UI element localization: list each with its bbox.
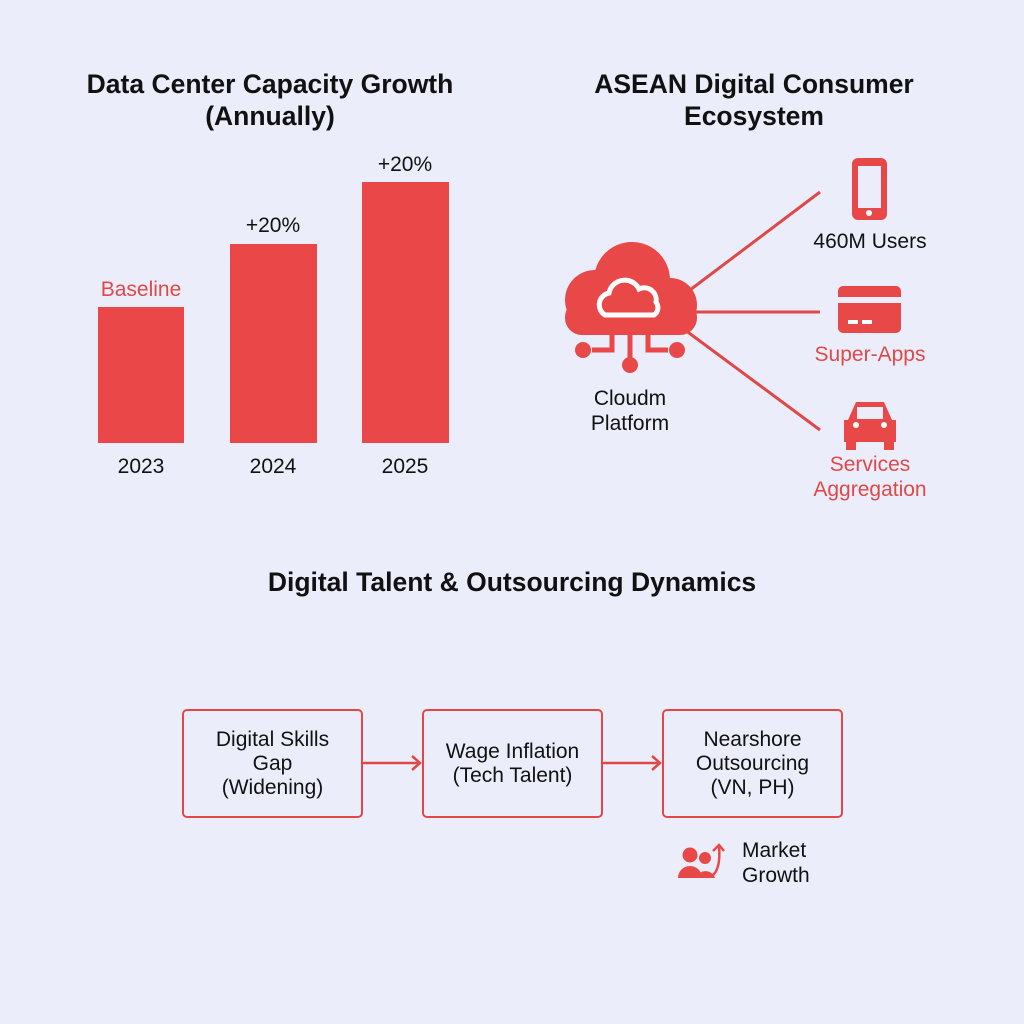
- connector lines: [685, 192, 820, 430]
- label: [742, 839, 810, 887]
- box 1: [182, 709, 363, 818]
- title: ecosystem: [594, 69, 914, 131]
- box 2: (Tech Talent): [453, 764, 572, 786]
- bar chart: +20%: [378, 153, 432, 176]
- label: Growth: [742, 864, 810, 887]
- icon: phone: [852, 158, 887, 220]
- label services: Aggregation: [813, 478, 927, 501]
- cloud label: Cloudm: [594, 387, 666, 410]
- cloud label: [591, 387, 669, 435]
- arrow 1: [363, 755, 422, 771]
- title: talent: Digital Talent & Outsourcing Dynamics: [268, 567, 756, 597]
- icon: car: [844, 402, 896, 450]
- label users: 460M Users: [813, 230, 927, 253]
- box 3: (VN, PH): [710, 776, 794, 798]
- bar 2025: [362, 182, 449, 443]
- box 2: Wage Inflation: [446, 740, 579, 762]
- bar 2023: [98, 307, 184, 443]
- title: ecosystem: ASEAN Digital Consumer: [594, 69, 914, 99]
- bar chart: +20%: [246, 214, 300, 237]
- icon: cloud: [565, 242, 697, 373]
- flow diagram: [182, 709, 843, 818]
- arrow 2: [603, 755, 662, 771]
- label services: [813, 453, 927, 501]
- box 2: [422, 709, 603, 818]
- icon: card: [838, 286, 901, 333]
- bar chart: 2025: [382, 455, 428, 478]
- box 1: Digital Skills: [216, 728, 329, 750]
- title: data center: Data Center Capacity Growth: [87, 69, 453, 99]
- box 3: Nearshore: [703, 728, 802, 750]
- label services: Services: [830, 453, 910, 476]
- icon: people growth: [678, 843, 725, 878]
- box 3: [662, 709, 843, 818]
- ecosystem diagram: [565, 158, 901, 450]
- label super-apps: Super-Apps: [815, 343, 925, 366]
- title: data center: [87, 69, 453, 131]
- title: ecosystem: Ecosystem: [684, 101, 824, 131]
- bar chart: 2024: [250, 455, 296, 478]
- bar 2024: [230, 244, 317, 443]
- axis labels: 2023: [118, 455, 164, 478]
- title: data center: (Annually): [205, 101, 335, 131]
- cloud label: Platform: [591, 412, 669, 435]
- bar chart: [98, 153, 449, 478]
- box 3: Outsourcing: [696, 752, 809, 774]
- box 1: Gap: [253, 752, 292, 774]
- label: Market: [742, 839, 806, 862]
- market growth: [678, 839, 810, 887]
- box 1: (Widening): [222, 776, 323, 798]
- bar labels: Baseline: [101, 278, 181, 301]
